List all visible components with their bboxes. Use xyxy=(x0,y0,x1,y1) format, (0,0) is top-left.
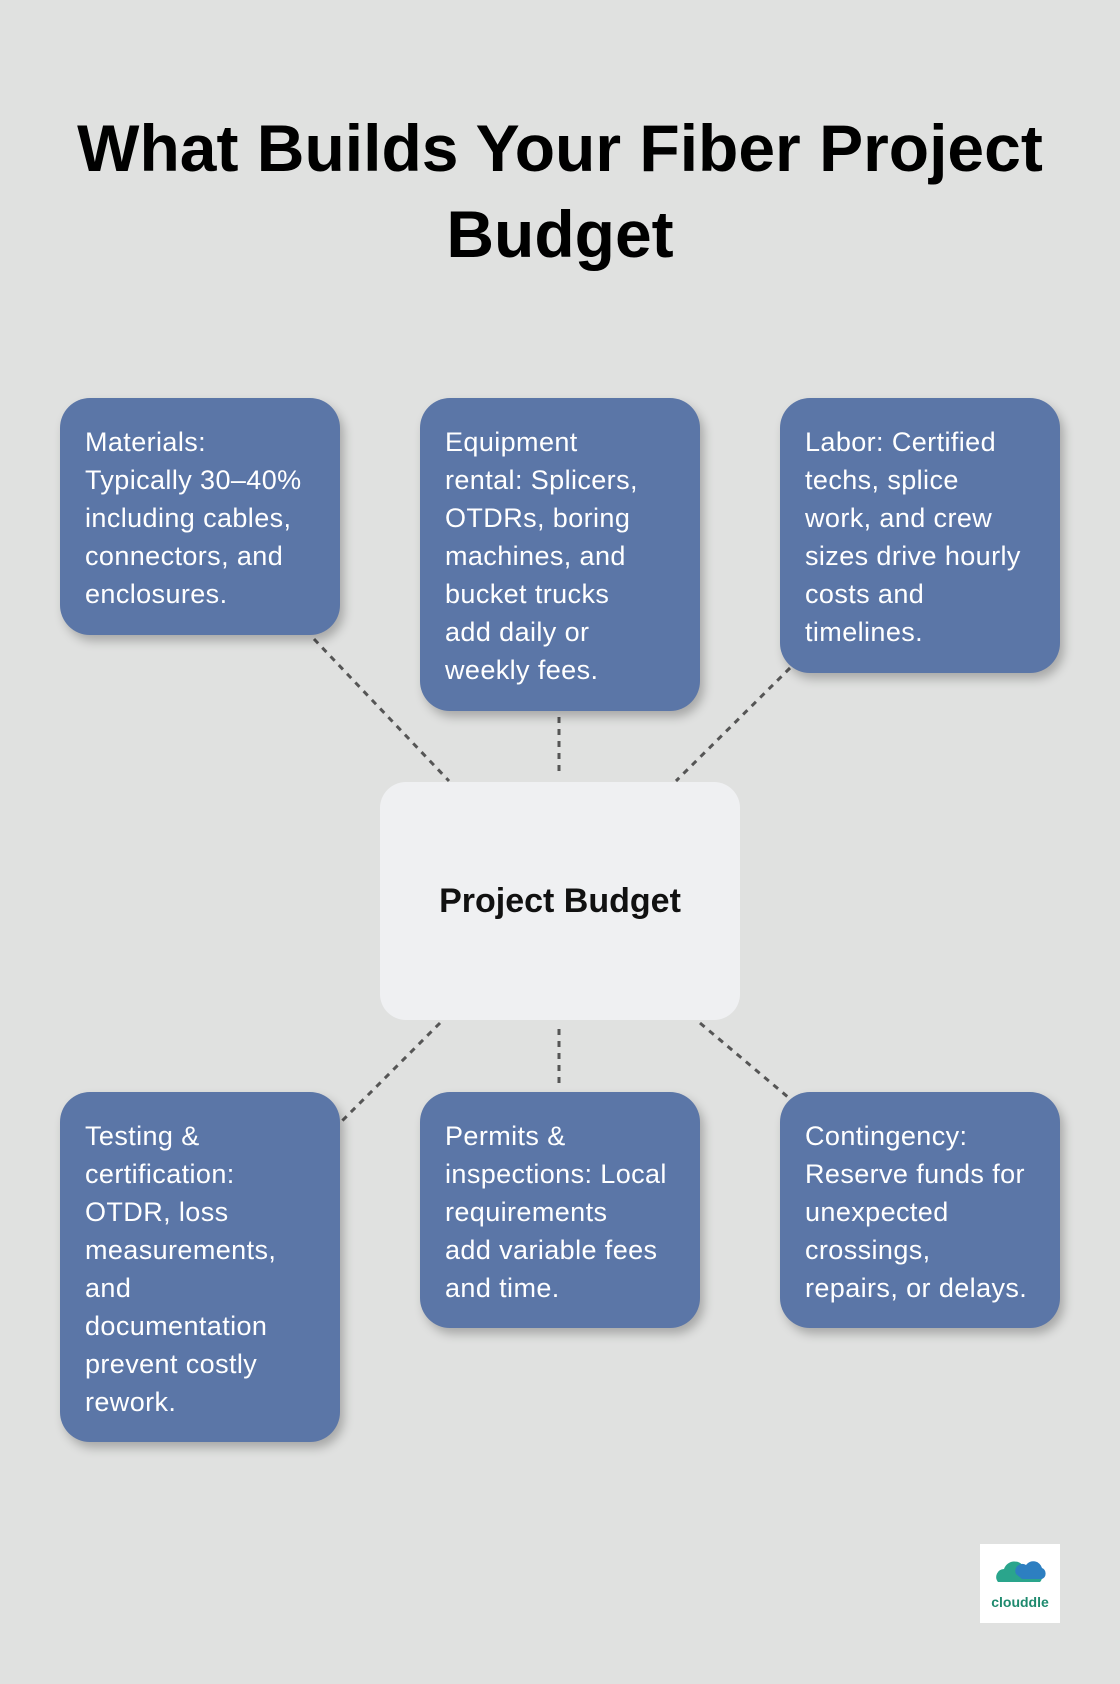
panel: contingency: Contingency: xyxy=(805,1121,967,1151)
panel: testing: measurements, xyxy=(85,1235,276,1265)
panel: equipment: weekly fees. xyxy=(445,655,598,685)
panel: permits: requirements xyxy=(445,1197,607,1227)
center: project budget xyxy=(380,782,740,1020)
panel: materials xyxy=(60,398,340,635)
panel: permits: and time. xyxy=(445,1273,560,1303)
panel: permits: Permits & xyxy=(445,1121,566,1151)
panel: materials: Materials: xyxy=(85,427,206,457)
panel: labor: sizes drive hourly xyxy=(805,541,1021,571)
panel: labor xyxy=(780,398,1060,673)
panel: testing: rework. xyxy=(85,1387,176,1417)
panel: testing: Testing & xyxy=(85,1121,200,1151)
panel: materials: enclosures. xyxy=(85,579,227,609)
panel: materials: including cables, xyxy=(85,503,291,533)
panel: contingency: unexpected xyxy=(805,1197,949,1227)
logo: clouddle xyxy=(991,1594,1049,1610)
panel: equipment: bucket trucks xyxy=(445,579,609,609)
panel: contingency: Reserve funds for xyxy=(805,1159,1025,1189)
panel: testing: prevent costly xyxy=(85,1349,257,1379)
panel: equipment: add daily or xyxy=(445,617,589,647)
panel: labor: work, and crew xyxy=(805,503,992,533)
panel: equipment: rental: Splicers, xyxy=(445,465,638,495)
panel: labor: costs and xyxy=(805,579,924,609)
panel: contingency xyxy=(780,1092,1060,1328)
panel: contingency: repairs, or delays. xyxy=(805,1273,1027,1303)
panel: testing: documentation xyxy=(85,1311,267,1341)
title: What Builds Your Fiber Project xyxy=(77,111,1043,185)
logo xyxy=(980,1544,1060,1623)
panel: permits: add variable fees xyxy=(445,1235,657,1265)
panel: labor: techs, splice xyxy=(805,465,959,495)
panel: testing: OTDR, loss xyxy=(85,1197,229,1227)
panel: contingency: crossings, xyxy=(805,1235,931,1265)
panel: labor: Labor: Certified xyxy=(805,427,996,457)
panel: equipment: Equipment xyxy=(445,427,578,457)
panel: equipment: OTDRs, boring xyxy=(445,503,630,533)
panel: labor: timelines. xyxy=(805,617,923,647)
panel: permits xyxy=(420,1092,700,1328)
panel: materials: connectors, and xyxy=(85,541,283,571)
panel: permits: inspections: Local xyxy=(445,1159,667,1189)
title: Budget xyxy=(446,197,674,271)
panel: testing: certification: xyxy=(85,1159,235,1189)
panel: testing xyxy=(60,1092,340,1442)
title xyxy=(77,111,1043,271)
panel: materials: Typically 30–40% xyxy=(85,465,302,495)
panel: equipment xyxy=(420,398,700,711)
center: project budget: Project Budget xyxy=(439,882,681,920)
panel: testing: and xyxy=(85,1273,131,1303)
panel: equipment: machines, and xyxy=(445,541,626,571)
